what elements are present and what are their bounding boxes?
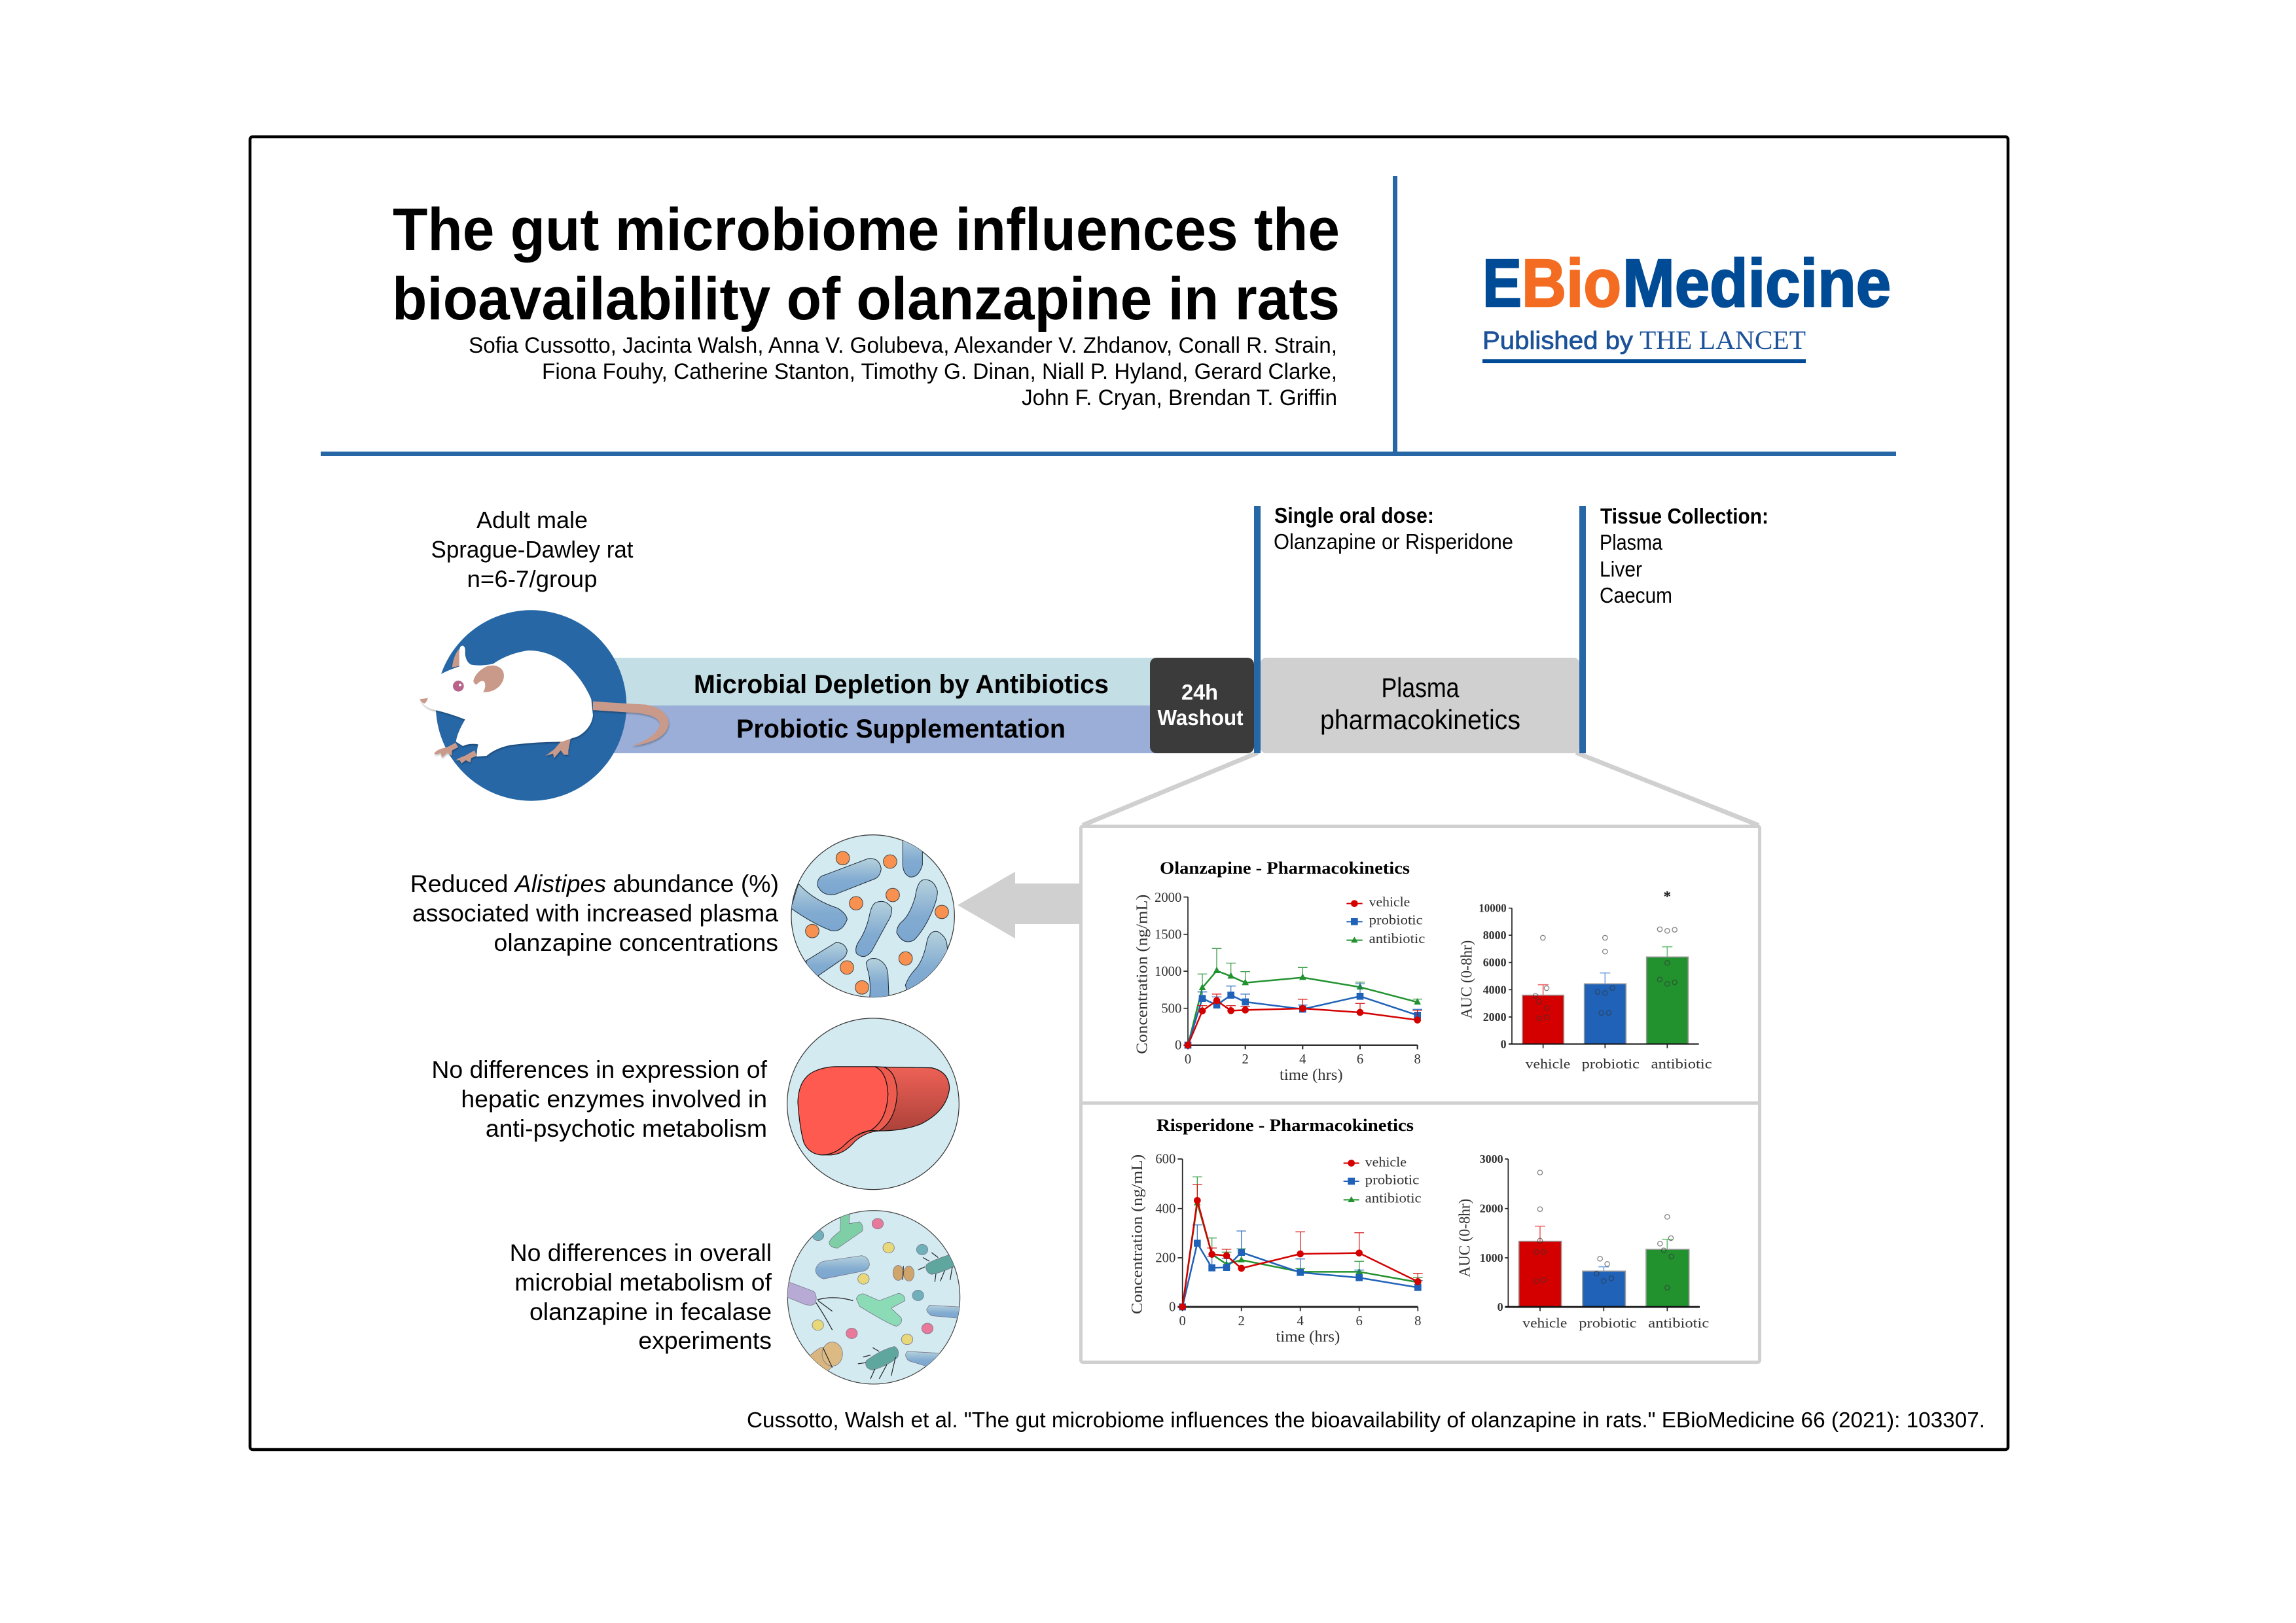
authors: Fiona Fouhy, Catherine Stanton, Timothy G. Dinan, Niall P. Hyland, Gerard Clarke, <box>542 359 1337 384</box>
finding 1 text: olanzapine concentrations <box>494 929 778 956</box>
chart: olanzapine concentration over time: Concentration (ng/mL) <box>1134 895 1151 1054</box>
logo: EBioMedicine, published by The Lancet: Published by <box>1482 327 1633 355</box>
finding 3 text <box>510 1239 772 1354</box>
authors: John F. Cryan, Brendan T. Griffin <box>1022 385 1337 410</box>
chart: olanzapine concentration over time: 8 <box>1414 1052 1421 1067</box>
timeline marker: single oral dose <box>1254 503 1513 753</box>
chart: olanzapine concentration over time: 4 <box>1299 1052 1306 1067</box>
chart: olanzapine AUC bars: probiotic <box>1582 1058 1640 1072</box>
finding 2 text: anti-psychotic metabolism <box>486 1115 767 1142</box>
icon: bacteria circle <box>791 835 954 1000</box>
series: vehicle <box>1185 994 1422 1048</box>
icon: mixed microbes circle <box>787 1211 961 1384</box>
logo: EBioMedicine, published by The Lancet: THE LANCET <box>1640 325 1806 355</box>
timeline marker: tissue collection: Caecum <box>1600 583 1672 607</box>
chart: risperidone concentration over time <box>1129 1152 1423 1346</box>
chart: olanzapine AUC bars: vehicle <box>1526 1058 1570 1072</box>
chart: risperidone concentration over time: 6 <box>1355 1314 1363 1329</box>
chart: risperidone AUC bars: 1000 <box>1480 1251 1503 1264</box>
legend <box>1344 1156 1422 1206</box>
chart: risperidone title: Risperidone - Pharmacokinetics <box>1157 1116 1414 1135</box>
series: probiotic <box>1179 1225 1423 1310</box>
legend: probiotic <box>1369 913 1423 927</box>
series: antibiotic <box>1183 1177 1423 1307</box>
chart: olanzapine AUC bars: * <box>1663 888 1671 905</box>
icon: rat on blue circle <box>420 610 669 801</box>
logo: EBioMedicine, published by The Lancet: Bio <box>1522 245 1621 321</box>
chart: risperidone concentration over time: 400 <box>1155 1202 1175 1216</box>
rat description text: n=6-7/group <box>467 565 597 592</box>
timeline marker: tissue collection: Tissue Collection: <box>1600 504 1768 528</box>
chart: risperidone concentration over time: 200 <box>1155 1251 1175 1266</box>
outer frame <box>250 137 2008 1450</box>
logo: EBioMedicine, published by The Lancet <box>1482 245 1891 363</box>
panel: pharmacokinetic charts frame <box>1081 826 1760 1363</box>
chart: olanzapine AUC bars: 4000 <box>1483 983 1507 996</box>
bar: microbial depletion by antibiotics: Microbial Depletion by Antibiotics <box>694 670 1109 699</box>
chart: risperidone AUC bars: antibiotic <box>1648 1316 1709 1330</box>
timeline bars <box>589 658 1579 753</box>
bar: probiotic supplementation: Probiotic Supplementation <box>736 715 1066 743</box>
legend: antibiotic <box>1365 1192 1422 1206</box>
chart: risperidone concentration over time: 2 <box>1238 1314 1245 1329</box>
chart: olanzapine AUC bars: 10000 <box>1479 902 1507 915</box>
chart: risperidone concentration over time: 600 <box>1155 1152 1175 1167</box>
chart: risperidone AUC bars: 0 <box>1498 1300 1503 1313</box>
chart: risperidone concentration over time: time (hrs) <box>1276 1329 1340 1346</box>
arrow from charts to findings <box>958 872 1080 938</box>
series: vehicle <box>1179 1185 1423 1310</box>
chart: risperidone AUC bars: AUC (0-8hr) <box>1457 1199 1474 1277</box>
legend: antibiotic <box>1369 932 1425 946</box>
timeline marker: tissue collection: Liver <box>1600 557 1642 581</box>
finding 1 text: associated with increased plasma <box>412 899 778 927</box>
timeline marker: single oral dose: Single oral dose: <box>1274 503 1434 527</box>
finding 2 text: hepatic enzymes involved in <box>461 1085 767 1113</box>
chart: olanzapine concentration over time: 2000 <box>1155 891 1181 905</box>
chart: olanzapine concentration over time: 1000 <box>1155 965 1181 979</box>
legend: vehicle <box>1365 1156 1407 1170</box>
chart: olanzapine concentration over time: 0 <box>1175 1038 1181 1052</box>
box: 24h washout <box>1150 658 1254 753</box>
citation: Cussotto, Walsh et al. "The gut microbiome influences the bioavailability of olanzapine in rats." EBioMedicine 66 (2021): 103307. <box>747 1408 1985 1432</box>
box: plasma pharmacokinetics: Plasma <box>1381 672 1460 703</box>
finding 1 text <box>410 870 779 956</box>
logo: EBioMedicine, published by The Lancet: E <box>1482 245 1522 321</box>
chart: risperidone concentration over time: 0 <box>1169 1300 1175 1315</box>
finding 3 text: No differences in overall <box>510 1239 772 1266</box>
chart: olanzapine concentration over time <box>1134 891 1425 1084</box>
rat description text: Sprague-Dawley rat <box>431 536 634 563</box>
box: 24h washout: 24h <box>1181 680 1218 704</box>
bar: microbial depletion by antibiotics <box>589 658 1158 705</box>
finding 2 text: No differences in expression of <box>431 1056 768 1083</box>
funnel lines from plasma box to chart panel <box>1083 753 1759 825</box>
legend <box>1346 895 1425 946</box>
chart: olanzapine concentration over time: 500 <box>1161 1001 1181 1016</box>
title: The gut microbiome influences the <box>393 196 1340 263</box>
chart: risperidone AUC bars: vehicle <box>1522 1316 1567 1330</box>
finding 3 text: microbial metabolism of <box>514 1268 772 1296</box>
icon: liver circle <box>787 1018 959 1190</box>
finding 3 text: experiments <box>638 1327 772 1354</box>
header rules <box>321 176 1896 456</box>
authors <box>469 333 1337 410</box>
series: probiotic <box>1185 984 1422 1048</box>
chart: olanzapine title: Olanzapine - Pharmacokinetics <box>1160 859 1410 878</box>
title <box>392 196 1340 332</box>
timeline marker: tissue collection: Plasma <box>1600 530 1663 554</box>
chart: olanzapine AUC bars: 0 <box>1501 1037 1507 1050</box>
chart: risperidone concentration over time: 8 <box>1414 1314 1421 1329</box>
chart: olanzapine AUC bars: AUC (0-8hr) <box>1458 940 1475 1019</box>
legend: probiotic <box>1365 1173 1419 1187</box>
chart: risperidone AUC bars: 3000 <box>1480 1152 1503 1166</box>
finding 3 text: olanzapine in fecalase <box>529 1298 772 1325</box>
chart: olanzapine AUC bars: 8000 <box>1483 929 1507 942</box>
logo: EBioMedicine, published by The Lancet: Medicine <box>1623 245 1891 321</box>
bar: probiotic supplementation <box>589 705 1158 753</box>
timeline marker: single oral dose: Olanzapine or Risperidone <box>1274 529 1513 554</box>
chart: risperidone concentration over time: 0 <box>1179 1314 1186 1329</box>
finding 1 text: Reduced Alistipes abundance (%) <box>410 870 779 897</box>
chart: risperidone concentration over time: Concentration (ng/mL) <box>1129 1154 1146 1314</box>
chart: olanzapine AUC bars: antibiotic <box>1651 1058 1712 1072</box>
legend: vehicle <box>1369 895 1410 910</box>
rat description text: Adult male <box>476 507 588 533</box>
box: 24h washout: Washout <box>1157 705 1244 730</box>
series: antibiotic <box>1188 948 1422 1045</box>
title: bioavailability of olanzapine in rats <box>392 266 1340 332</box>
chart: risperidone AUC bars: 2000 <box>1480 1202 1503 1215</box>
chart: risperidone AUC bars: probiotic <box>1579 1316 1637 1330</box>
finding 2 text <box>431 1056 768 1142</box>
chart: olanzapine concentration over time: 6 <box>1357 1052 1363 1067</box>
chart: olanzapine AUC bars: 2000 <box>1483 1010 1507 1024</box>
box: plasma pharmacokinetics: pharmacokinetics <box>1320 704 1520 735</box>
chart: olanzapine AUC bars: 6000 <box>1483 956 1507 969</box>
chart: olanzapine concentration over time: time (hrs) <box>1280 1067 1343 1084</box>
chart: risperidone AUC bars <box>1457 1152 1709 1330</box>
authors: Sofia Cussotto, Jacinta Walsh, Anna V. Golubeva, Alexander V. Zhdanov, Conall R. Strain, <box>469 333 1337 358</box>
chart: olanzapine concentration over time: 0 <box>1185 1052 1191 1067</box>
chart: olanzapine concentration over time: 1500 <box>1155 928 1181 942</box>
box: plasma pharmacokinetics <box>1261 658 1579 753</box>
chart: risperidone concentration over time: 4 <box>1297 1314 1304 1329</box>
chart: olanzapine AUC bars <box>1458 888 1712 1072</box>
chart: olanzapine concentration over time: 2 <box>1242 1052 1249 1067</box>
rat description text <box>431 507 634 592</box>
timeline marker: tissue collection <box>1579 504 1768 753</box>
